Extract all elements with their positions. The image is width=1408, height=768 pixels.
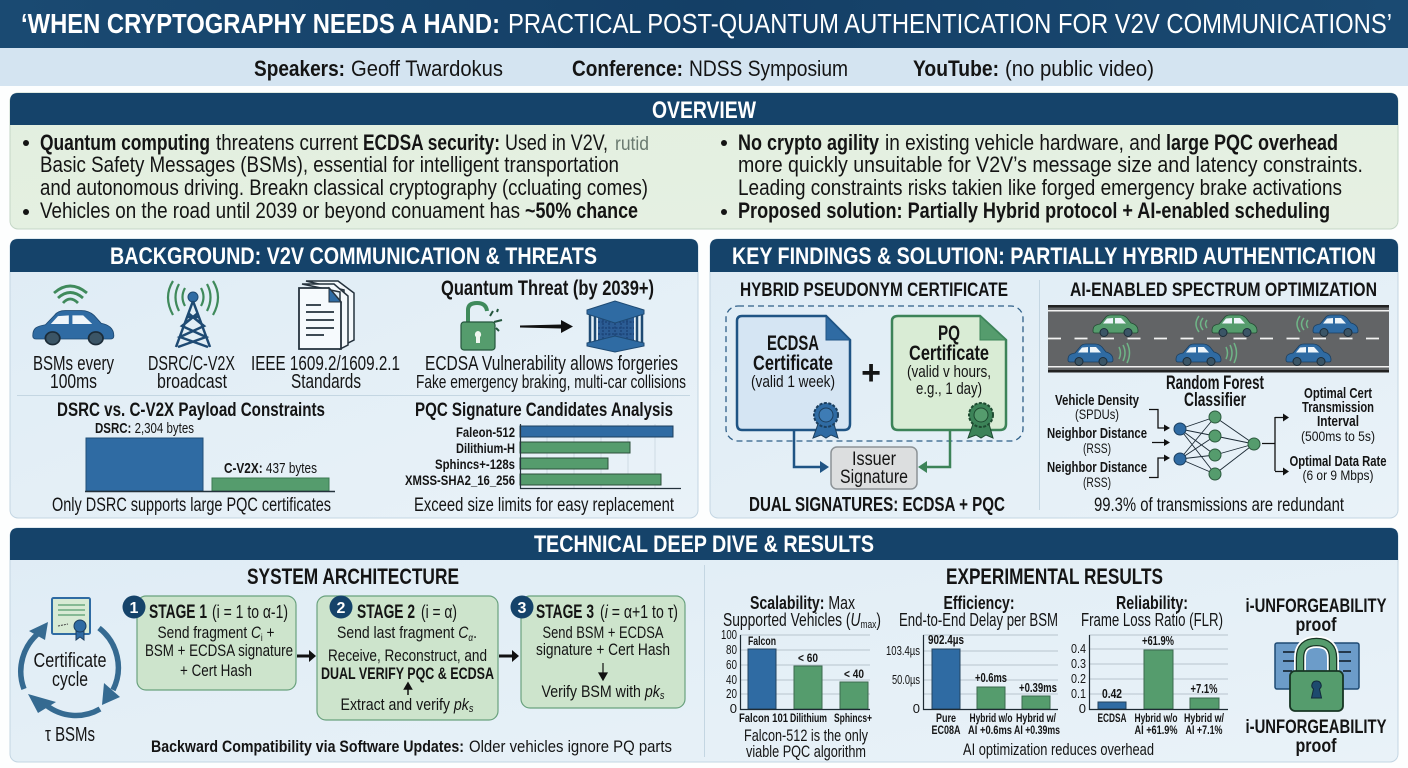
stage 1 box: Send fragment C [158,623,269,642]
label: IEEE standards: Standards [291,371,361,393]
panel: technical deep dive: TECHNICAL DEEP DIVE & RESULTS [534,531,874,558]
classifier inputs [1047,392,1147,490]
icon: car with signal [33,286,114,345]
chart: scalability: < 40 [844,667,864,681]
arrow: stage 1 to 2 [297,650,316,662]
classifier inputs: (RSS) [1083,440,1111,456]
panel: technical deep dive [10,528,1398,762]
overview left bullets: Quantum computing [40,130,210,155]
overview left bullets: Vehicles on the road until 2039 or beyond conuament has [40,198,520,223]
PQ certificate [892,316,1006,438]
classifier inputs: Vehicle Density [1055,392,1139,409]
stage 3 box: STAGE 3 [536,602,594,623]
stage 3 box: signature + Cert Hash [536,640,670,659]
chart: reliability: Frame Loss Ratio (FLR) [1081,610,1223,630]
label: IEEE standards: IEEE 1609.2/1609.2.1 [251,353,400,375]
stage 2 box: Receive, Reconstruct, and [328,646,487,665]
chart: scalability: max [860,619,877,631]
issuer signature box: Issuer [852,449,897,470]
classifier outputs: (6 or 9 Mbps) [1302,467,1374,483]
stage 3 box: s [660,690,665,702]
overview left bullets: ~50% chance [525,198,638,223]
panel: background: BACKGROUND: V2V COMMUNICATION & THREATS [110,243,597,270]
stage 2 box: Send last fragment C [337,623,480,642]
chart: scalability: Scalability: Max [750,593,855,613]
chart: efficiency: Pure [936,711,956,725]
icon: certificate cycle: τ BSMs [45,724,95,746]
PQ certificate: (valid v hours, [907,362,991,381]
speaker info bar [0,48,1408,86]
chart: scalability: Falcon [748,634,776,648]
chart: reliability: +7.1% [1190,681,1218,696]
speaker info bar: Geoff Twardokus [351,56,503,81]
chart: efficiency: AI +0.6ms [968,723,1012,737]
overview left bullets [23,130,649,223]
label: BSMs [33,353,114,393]
heading: quantum threat: Quantum Threat (by 2039+) [441,277,654,300]
speaker info bar: NDSS Symposium [689,56,848,81]
speaker info bar: Speakers: [254,56,345,81]
overview right bullets: in existing vehicle hardware, and [885,130,1161,155]
ECDSA certificate [737,316,850,438]
stage 3 box: (i = α+1 to τ) [600,602,678,622]
ECDSA certificate: Certificate [753,352,833,375]
icon: quantum computer [587,301,644,352]
chart: reliability: 0.3 [1071,656,1086,671]
stage 2 box: . [473,623,477,642]
chart: scalability: Falcon 101 [739,711,788,725]
heading: system architecture: SYSTEM ARCHITECTURE [247,564,459,589]
chart: PQC signature candidates: Exceed size limits for easy replacement [414,495,675,516]
chart: DSRC vs C-V2X payload: DSRC: 2,304 bytes [95,420,194,437]
chart: DSRC vs C-V2X payload: DSRC vs. C-V2X Payload Constraints [57,400,325,421]
chart: scalability: 40 [726,672,737,687]
stage 2 box: Extract and verify pk [340,695,472,714]
stage 1 box: + [263,623,275,642]
icon: broken padlock [461,303,502,350]
chart: reliability: 0.42 [1102,686,1122,701]
overview left bullets: rutid [615,134,649,155]
connector: ECDSA to issuer [794,430,829,473]
stage 3 box [510,596,685,708]
heading: hybrid certificate: HYBRID PSEUDONYM CERTIFICATE [740,280,1008,301]
overview right bullets: large PQC overhead [1166,130,1338,155]
heading: experimental results: EXPERIMENTAL RESULTS [946,564,1163,589]
chart: PQC signature candidates [405,400,681,516]
chart: scalability: Dilithium [790,711,827,725]
icon: certificate cycle: cycle [52,669,88,691]
backward compatibility note: Backward Compatibility via Software Updates: [151,737,464,756]
label: i-unforgeability bottom [1246,717,1387,757]
chart: scalability: 0 [730,701,737,716]
stage 1 box: (i = 1 to α-1) [212,602,288,622]
neural network [1174,411,1260,480]
stage 2 box: α [468,633,473,644]
ECDSA certificate: (valid 1 week) [751,372,835,391]
overview right bullets [721,130,1363,223]
arrow: stage 2 to 3 [499,650,519,662]
PQ certificate: PQ [938,322,960,345]
chart: scalability [721,593,881,761]
classifier outputs: (500ms to 5s) [1301,428,1375,444]
chart: efficiency: AI +0.39ms [1014,723,1060,737]
chart: reliability: 0 [1079,701,1086,716]
chart: DSRC vs C-V2X payload: Only DSRC supports large PQC certificates [52,495,331,516]
backward compatibility note: Older vehicles ignore PQ parts [469,737,672,756]
classifier inputs: Neighbor Distance [1047,459,1147,476]
chart: scalability: 100 [721,627,737,642]
chart: efficiency: Hybrid w/ [1016,711,1056,725]
classifier outputs: Transmission [1302,399,1374,416]
classifier outputs: Interval [1317,413,1359,430]
chart: efficiency [886,593,1060,737]
chart: reliability [1071,593,1228,737]
chart: reliability: +61.9% [1142,633,1174,648]
chart: efficiency: 0 [913,701,920,716]
stage 1 box: i [261,633,263,644]
panel: overview: OVERVIEW [652,97,756,124]
panel: background [10,239,698,518]
label: ECDSA vulnerability: ECDSA Vulnerability allows forgeries [425,353,678,375]
dashed certificate group [726,306,1023,441]
icon: certificate cycle [21,598,120,746]
overview left bullets: Basic Safety Messages (BSMs), essential for intelligent transportation [40,152,619,177]
stage 2 box: DUAL VERIFY PQC & ECDSA [321,664,494,683]
stage 2 box: (i = α) [421,602,457,622]
chart: scalability: Sphincs+ [834,711,872,725]
stage 2 box: STAGE 2 [357,602,415,623]
classifier outputs: Optimal Cert [1304,385,1372,402]
label: ECDSA vulnerability: Fake emergency braking, multi-car collisions [416,372,686,392]
stage 3 box: Verify BSM with pk [542,682,663,701]
stage 1 box: + Cert Hash [180,661,252,680]
chart: efficiency: 50.0µs [892,672,920,687]
arrows: into classifier [1149,410,1170,478]
PQ certificate: e.g., 1 day) [916,379,982,398]
chart: scalability: < 60 [798,651,818,665]
issuer signature box [831,447,917,489]
stage 1 box [122,596,296,690]
speaker info bar: YouTube: [913,56,999,81]
stage 1 box: 1 [130,600,139,617]
caption: AI optimization: AI optimization reduces overhead [963,740,1154,759]
speaker info bar: (no public video) [1005,56,1154,81]
chart: efficiency: 103.4µs [886,643,920,658]
stage 1 box: STAGE 1 [149,602,207,623]
chart: DSRC vs C-V2X payload [52,400,335,516]
arrow: threat [520,320,573,333]
heading: random forest: Classifier [1184,390,1246,411]
icon: blue rosette [813,403,838,438]
chart: efficiency: +0.39ms [1019,680,1057,695]
label: i-unforgeability bottom: proof [1296,736,1337,757]
icon: padlock on document [1275,642,1359,711]
title banner [0,0,1408,48]
overview left bullets: and autonomous driving. Breakn classical cryptography (ccluating comes) [40,175,648,200]
label: DSRC/C-V2X: DSRC/C-V2X [148,353,235,375]
chart: scalability: 20 [726,686,737,701]
chart: reliability: Reliability: [1116,593,1188,613]
stage 2 box [317,596,498,720]
overview left bullets: ECDSA security: [363,130,500,155]
chart: reliability: ECDSA [1098,711,1127,725]
stage 2 box: s [469,703,474,715]
stage 1 box: BSM + ECDSA signature [145,641,293,660]
icon: radio tower [168,281,218,347]
chart: PQC signature candidates: Dilithium-H [456,440,515,456]
icon: document stack [299,281,354,349]
label: DSRC/C-V2X: broadcast [157,371,227,393]
chart: PQC signature candidates: XMSS-SHA2_16_256 [405,472,515,488]
icon: certificate cycle: Certificate [34,650,106,672]
stage 3 box: 3 [518,600,527,617]
label: i-unforgeability top: proof [1296,615,1337,636]
stage 3 box: Send BSM + ECDSA [542,623,664,642]
chart: reliability: AI +7.1% [1186,723,1223,737]
chart: DSRC vs C-V2X payload: C-V2X: 437 bytes [224,460,317,477]
classifier inputs: (RSS) [1083,474,1111,490]
plus sign: + [861,354,881,392]
chart: reliability: 0.4 [1071,641,1086,656]
icon: green rosette [968,403,993,438]
chart: efficiency: +0.6ms [975,670,1007,685]
overview left bullets: Used in V2V, [505,130,608,155]
chart: scalability: 60 [726,657,737,672]
classifier inputs: Neighbor Distance [1047,425,1147,442]
label: i-unforgeability top [1246,596,1387,636]
label: IEEE standards [251,353,400,393]
chart: PQC signature candidates: PQC Signature Candidates Analysis [415,400,673,421]
chart: efficiency: EC08A [932,723,961,737]
issuer signature box: Signature [840,467,908,488]
title banner: ‘WHEN CRYPTOGRAPHY NEEDS A HAND: [21,8,500,39]
road illustration [1048,305,1389,372]
overview left bullets: threatens current [216,130,358,155]
chart: reliability: 0.2 [1071,671,1086,686]
chart: efficiency: Hybrid w/o [970,711,1012,725]
chart: scalability: Falcon-512 is the only [744,726,868,745]
chart: reliability: Hybrid w/o [1134,711,1178,725]
classifier outputs [1290,385,1386,483]
heading: random forest: Random Forest [1166,373,1264,394]
heading: random forest [1166,373,1264,411]
ECDSA certificate: ECDSA [767,332,819,355]
label: dual signatures: DUAL SIGNATURES: ECDSA + PQC [749,494,1005,516]
stage 2 box: 2 [337,600,346,617]
chart: PQC signature candidates: Faleon-512 [456,424,515,440]
chart: scalability: viable PQC algorithm [746,742,866,761]
connector: PQ to issuer [918,430,950,473]
chart: scalability: Supported Vehicles (U [723,610,889,630]
chart: PQC signature candidates: Sphincs+-128s [435,456,515,472]
chart: efficiency: End-to-End Delay per BSM [899,610,1058,630]
chart: reliability: AI +61.9% [1134,723,1178,737]
chart: reliability: Hybrid w/ [1184,711,1224,725]
chart: efficiency: Efficiency: [944,593,1014,613]
classifier inputs: (SPDUs) [1075,406,1119,422]
caption: redundant transmissions: 99.3% of transmissions are redundant [1094,495,1345,516]
chart: efficiency: 902.4µs [928,632,964,647]
chart: reliability: 0.1 [1071,686,1086,701]
overview right bullets: No crypto agility [738,130,880,155]
label: BSMs: 100ms [50,371,97,393]
label: ECDSA vulnerability [416,353,686,392]
chart: scalability: ) [876,610,881,630]
chart: scalability: 80 [726,642,737,657]
PQ certificate: Certificate [909,342,989,365]
speaker info bar: Conference: [572,56,683,81]
panel: key findings [710,239,1398,518]
arrows: out of classifier [1262,414,1289,476]
label: DSRC/C-V2X [148,353,235,393]
panel: overview [10,93,1398,229]
label: BSMs: BSMs every [33,353,114,375]
